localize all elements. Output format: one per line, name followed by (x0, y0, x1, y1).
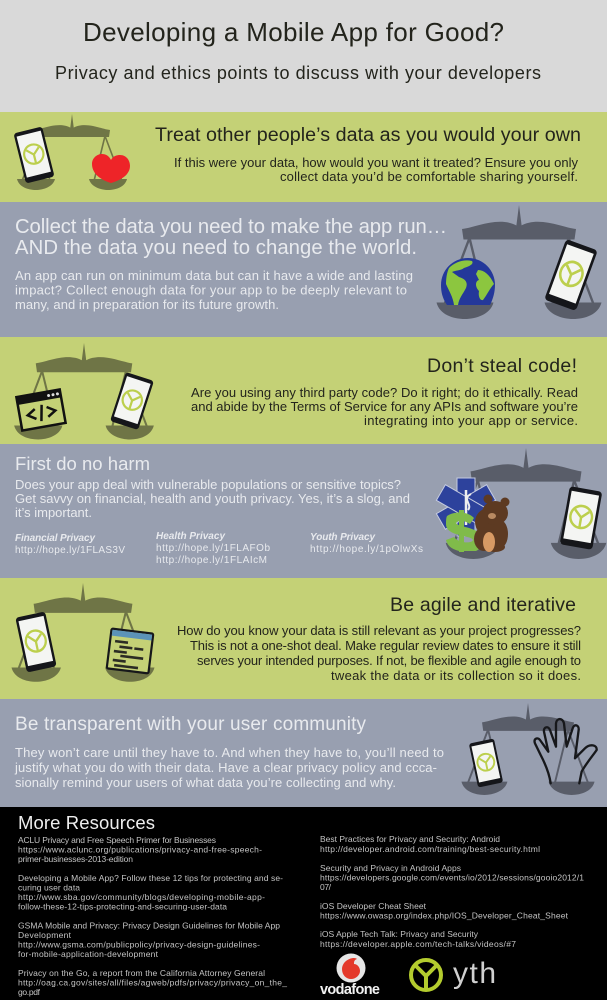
panel: agile and iterative (0, 578, 607, 699)
body text: tweak the data or its collection so it does. (331, 668, 581, 683)
body text (177, 623, 581, 683)
body text: integrating into your app or service. (364, 413, 578, 428)
body text: collect data you’d be comfortable sharing yourself. (280, 169, 578, 184)
body text: How do you know your data is still relevant as your project progresses? (177, 623, 581, 638)
panel: be transparent (0, 699, 607, 807)
icon: scale with code window and phone (14, 343, 154, 440)
body text: impact? Collect enough data for your app to be deeply relevant to (15, 282, 407, 298)
body text: Does your app deal with vulnerable populations or sensitive topics? (15, 477, 401, 492)
title: Developing a Mobile App for Good? (83, 17, 504, 47)
body text (14, 745, 444, 790)
body text: This is not a one-shot deal. Make regular review dates to ensure it still (190, 638, 581, 653)
body text: justify what you do with their data. Have a clear privacy policy and ccca- (14, 760, 437, 775)
resources right column: iOS Developer Cheat Sheet (320, 901, 427, 911)
body text: An app can run on minimum data but can it have a wide and lasting (15, 268, 413, 283)
resources left column: Developing a Mobile App? Follow these 12 tips for protecting and se- (18, 873, 283, 883)
youth privacy link: Youth Privacy (310, 532, 375, 543)
youth privacy link (310, 532, 423, 555)
resources left column: go.pdf (18, 987, 41, 997)
body text: it’s important. (15, 505, 92, 520)
body text: many, and in preparation for its future growth. (15, 297, 279, 312)
icon: scale with globe and phone (436, 205, 602, 319)
body text (15, 268, 413, 312)
body text: Get savvy on financial, health and youth privacy. Yes, it’s a slog, and (15, 491, 410, 506)
subtitle: Privacy and ethics points to discuss with your developers (55, 63, 541, 83)
resources left column: GSMA Mobile and Privacy: Privacy Design Guidelines for Mobile App (18, 920, 280, 930)
logo: yth (411, 957, 496, 990)
health privacy links: http://hope.ly/1FLAIcM (156, 555, 267, 566)
body text: and abide by the Terms of Service for any APIs and software you’re (191, 399, 578, 414)
panel: collect the data (0, 202, 607, 337)
resources left column: follow-these-12-tips-protecting-and-securing-user-data (18, 902, 227, 912)
resources left column (18, 835, 287, 997)
resources right column (320, 834, 584, 949)
resources left column: http://www.sba.gov/community/blogs/developing-mobile-app- (18, 892, 265, 902)
resources right column: https://developers.google.com/events/io/2012/sessions/gooio2012/1 (320, 872, 584, 882)
health privacy links: Health Privacy (156, 531, 225, 542)
heading: Collect the data you need to make the app run… (15, 216, 447, 238)
resources right column: Best Practices for Privacy and Security: Android (320, 834, 500, 844)
financial privacy link: Financial Privacy (15, 533, 95, 544)
body text: Are you using any third party code? Do it right; do it ethically. Read (191, 385, 578, 400)
resources right column: 07/ (320, 882, 332, 892)
resources left column: https://www.aclunc.org/publications/privacy-and-free-speech- (18, 844, 262, 854)
panel: do not steal code (0, 337, 607, 444)
resources right column: https://developer.apple.com/tech-talks/videos/#7 (320, 939, 516, 949)
resources right column: https://www.owasp.org/index.php/IOS_Developer_Cheat_Sheet (320, 910, 569, 920)
resources left column: ACLU Privacy and Free Speech Primer for Businesses (18, 835, 216, 845)
resources left column: Development (18, 930, 72, 940)
heading: Be agile and iterative (390, 594, 576, 616)
body text: They won’t care until they have to. And when they have to, you’ll need to (15, 745, 444, 760)
heading: Be transparent with your user community (15, 714, 366, 735)
body text: If this were your data, how would you want it treated? Ensure you only (174, 155, 578, 170)
resources left column: http://www.gsma.com/publicpolicy/privacy-design-guidelines- (18, 940, 260, 950)
resources left column: Privacy on the Go, a report from the California Attorney General (18, 968, 265, 978)
resources left column: http://oag.ca.gov/sites/all/files/agweb/pdfs/privacy/privacy_on_the_ (18, 978, 287, 988)
logo: vodafone (320, 954, 380, 998)
body text (191, 385, 578, 428)
health privacy links (156, 531, 270, 566)
heading: More Resources (18, 812, 155, 833)
icon: scale with medical star, dollar, bear and phone (436, 448, 606, 559)
resources left column: for-mobile-application-development (18, 949, 159, 959)
header band (0, 0, 607, 112)
resources right column: iOS Apple Tech Talk: Privacy and Security (320, 929, 479, 939)
icon: scale with phone and hand (461, 703, 597, 795)
logo: vodafone: vodafone (320, 982, 380, 998)
resources right column: Security and Privacy in Android Apps (320, 863, 461, 873)
icon: scale with phone and tablet (12, 583, 155, 682)
resources left column: curing user data (18, 882, 80, 892)
resources right column: http://developer.android.com/training/best-security.html (320, 844, 540, 854)
health privacy links: http://hope.ly/1FLAFOb (156, 543, 270, 554)
panel: first do no harm (0, 444, 607, 578)
heading: Treat other people’s data as you would your own (155, 124, 581, 146)
youth privacy link: http://hope.ly/1pOlwXs (310, 544, 423, 555)
body text (174, 155, 578, 184)
body text: serves your intended purposes. If not, be flexible and agile enough to (197, 653, 581, 668)
logo: yth: yth (453, 957, 496, 990)
heading: Don’t steal code! (427, 355, 577, 377)
financial privacy link: http://hope.ly/1FLAS3V (15, 545, 125, 556)
financial privacy link (15, 533, 125, 556)
icon: scale with phone and heart (13, 114, 130, 190)
heading: AND the data you need to change the world. (15, 237, 417, 259)
body text: sionally remind your users of what data you’re collecting and why. (15, 775, 396, 790)
body text (15, 477, 410, 520)
resources left column: primer-businesses-2013-edition (18, 854, 133, 864)
panel: more resources (0, 807, 607, 1000)
heading (15, 216, 447, 259)
panel: treat data as your own (0, 112, 607, 202)
heading: First do no harm (15, 453, 150, 474)
